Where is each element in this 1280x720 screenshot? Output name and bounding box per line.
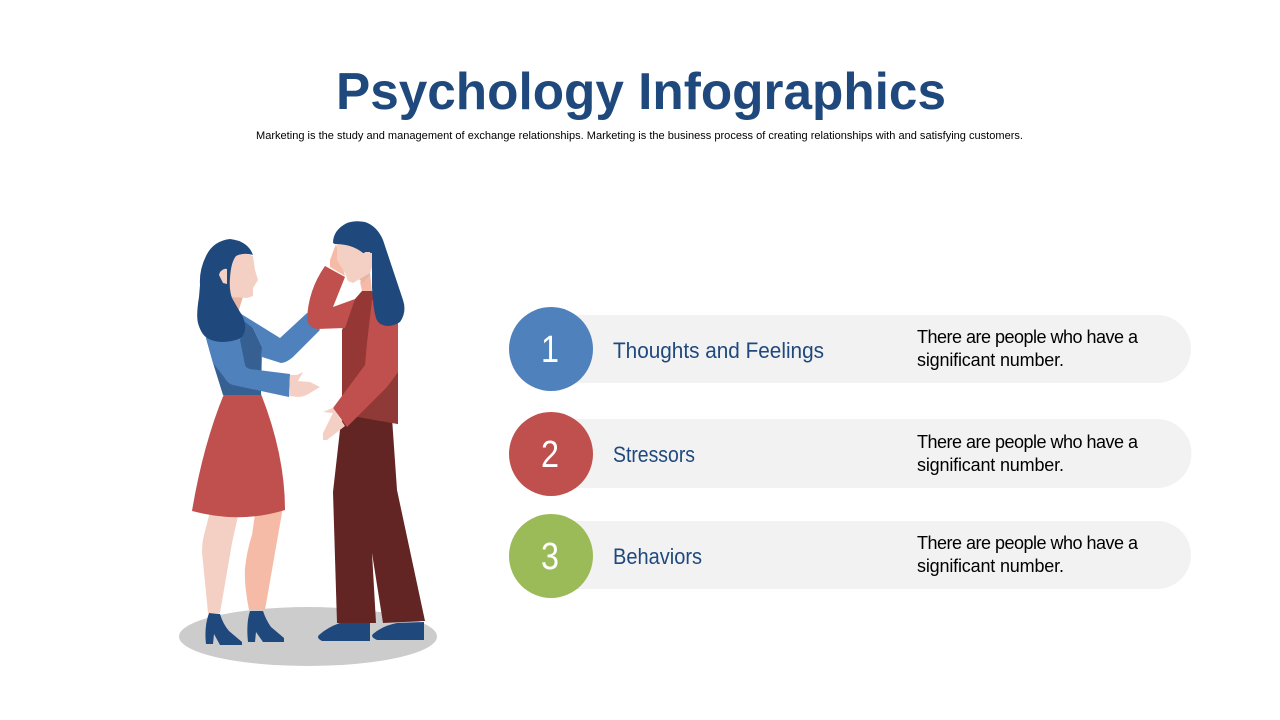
number: 1 — [541, 329, 559, 371]
row heading: Thoughts and Feelings — [613, 338, 824, 363]
raised arm — [238, 312, 320, 363]
torso — [342, 291, 398, 424]
ear — [363, 252, 372, 267]
hand on face — [330, 244, 345, 276]
number badge — [509, 412, 593, 496]
row 2: Stressors — [509, 412, 1192, 496]
number: 2 — [541, 434, 559, 476]
shoes — [205, 613, 242, 645]
torso — [206, 312, 262, 395]
row text: significant number. — [917, 556, 1064, 576]
face — [337, 240, 374, 283]
row 3: Behaviors — [509, 514, 1191, 598]
row heading: Behaviors — [613, 544, 702, 569]
ear — [219, 269, 227, 284]
lower arm — [206, 335, 290, 397]
right woman — [307, 221, 425, 641]
face — [226, 252, 258, 298]
pill — [551, 315, 1191, 383]
row text: There are people who have a — [917, 533, 1139, 553]
pill — [551, 419, 1192, 488]
pill — [551, 521, 1191, 589]
row text: There are people who have a — [917, 432, 1139, 452]
skirt — [192, 394, 285, 517]
number badge — [509, 307, 593, 391]
trousers — [333, 415, 425, 623]
ground shadow — [179, 607, 437, 666]
row text: significant number. — [917, 350, 1064, 370]
hair — [333, 221, 404, 326]
shoes — [318, 623, 370, 641]
row 1: Thoughts and Feelings — [509, 307, 1191, 391]
number badge — [509, 514, 593, 598]
torso lower shade — [358, 372, 398, 424]
left woman — [192, 239, 320, 645]
neck — [360, 273, 372, 291]
neck — [226, 290, 243, 313]
hand — [323, 407, 345, 440]
lower arm — [333, 300, 398, 427]
hair — [197, 239, 253, 342]
title: Psychology Infographics — [336, 63, 946, 121]
raised arm — [307, 266, 355, 329]
illustration: two women talking — [179, 221, 437, 666]
number: 3 — [541, 536, 559, 578]
hand — [289, 372, 320, 397]
legs — [202, 512, 238, 613]
row heading: Stressors — [613, 442, 695, 467]
row text: significant number. — [917, 455, 1064, 475]
row text: There are people who have a — [917, 327, 1139, 347]
subtitle: Marketing is the study and management of exchange relationships. Marketing is the business process of creating relationships with and satisfying customers. — [256, 130, 1023, 142]
